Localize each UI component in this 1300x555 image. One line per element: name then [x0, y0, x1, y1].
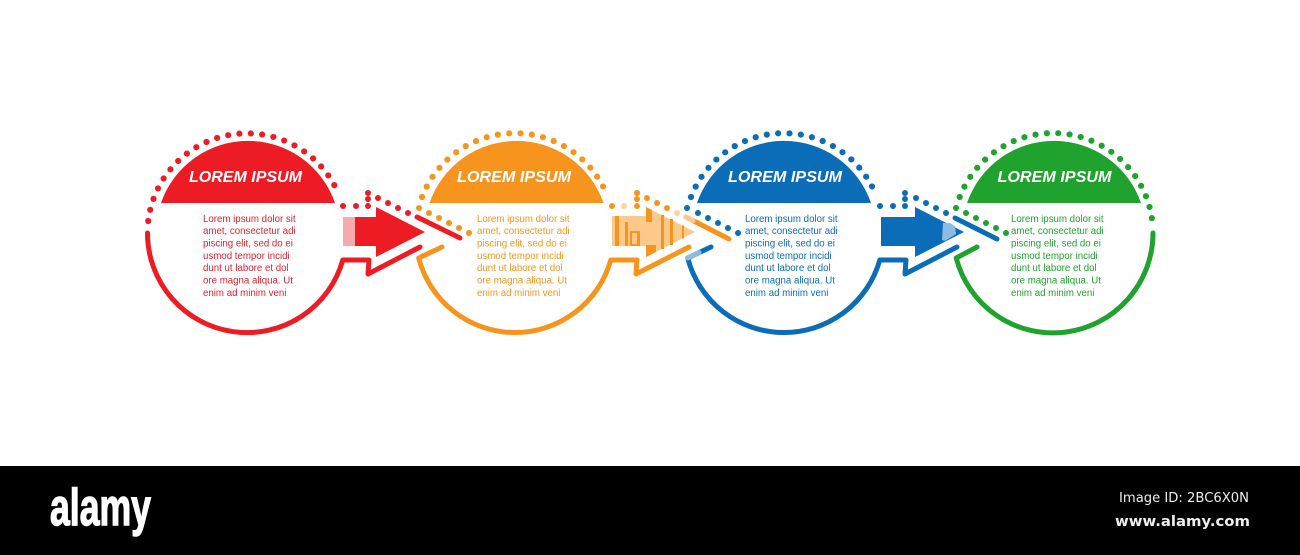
- dotted upper ring: [422, 133, 607, 197]
- panel: step 4 green: [953, 133, 1153, 333]
- body text: usmod tempor incidi: [745, 251, 832, 262]
- lower ring with connector: [419, 247, 689, 333]
- dotted upper ring: [148, 133, 339, 221]
- lower ring with connector: [688, 247, 957, 333]
- connector dots: [340, 190, 411, 216]
- panel: step 1 red: [147, 133, 460, 333]
- body text: ore magna aliqua. Ut: [1011, 276, 1101, 286]
- body text: amet, consectetur adi: [203, 226, 296, 237]
- footer band: [0, 466, 1300, 555]
- pointer bar: [686, 217, 729, 239]
- body text: Lorem ipsum dolor sit: [203, 214, 296, 225]
- website: www.alamy.com: [1115, 514, 1250, 530]
- body text: piscing elit, sed do ei: [203, 238, 293, 250]
- body text: usmod tempor incidi: [1011, 251, 1098, 262]
- ring watermark: [688, 252, 699, 258]
- arrow with watermark stripes: [612, 207, 695, 257]
- arrow: [343, 207, 425, 257]
- dotted upper ring: [960, 133, 1152, 222]
- body text: enim ad minim veni: [203, 288, 286, 299]
- heading cap: [967, 141, 1141, 203]
- body text: Lorem ipsum dolor sit: [477, 214, 570, 225]
- body text: enim ad minim veni: [745, 288, 828, 299]
- body text: dunt ut labore et dol: [203, 263, 289, 274]
- pointer bar watermark: [686, 217, 693, 220]
- heading cap: [161, 141, 335, 203]
- body text: ore magna aliqua. Ut: [203, 276, 293, 286]
- body text: enim ad minim veni: [477, 288, 560, 299]
- body text: usmod tempor incidi: [203, 251, 290, 262]
- heading: LOREM IPSUM: [998, 169, 1113, 186]
- connector dots: [877, 190, 949, 216]
- heading: LOREM IPSUM: [728, 169, 843, 186]
- body text: dunt ut labore et dol: [477, 263, 563, 274]
- heading: LOREM IPSUM: [189, 169, 303, 186]
- body text: dunt ut labore et dol: [1011, 263, 1097, 274]
- body text: amet, consectetur adi: [745, 226, 838, 237]
- heading: LOREM IPSUM: [457, 169, 572, 186]
- body text: piscing elit, sed do ei: [1011, 238, 1101, 250]
- body text: Lorem ipsum dolor sit: [1011, 214, 1104, 225]
- body text: enim ad minim veni: [1011, 288, 1094, 299]
- body text: piscing elit, sed do ei: [477, 238, 567, 250]
- panel: step 3 blue: [684, 133, 997, 333]
- logo: alamy: alamy: [50, 479, 151, 537]
- body text: usmod tempor incidi: [477, 251, 564, 262]
- pointer bar: [417, 217, 460, 238]
- body text: amet, consectetur adi: [477, 226, 570, 237]
- image id: Image ID: 2BC6X0N: [1119, 490, 1249, 506]
- heading cap: [430, 141, 604, 203]
- panel: step 2 orange: [416, 133, 729, 333]
- body text: ore magna aliqua. Ut: [477, 276, 567, 286]
- connector dots: [609, 190, 680, 216]
- dotted upper ring: [691, 133, 876, 197]
- watermark fragment: [942, 223, 956, 241]
- incoming dots: [684, 205, 741, 236]
- body text: ore magna aliqua. Ut: [745, 276, 835, 286]
- incoming dots: [416, 205, 472, 236]
- body text: dunt ut labore et dol: [745, 263, 831, 274]
- lower ring: [956, 233, 1153, 333]
- heading cap: [697, 141, 871, 203]
- body text: piscing elit, sed do ei: [745, 238, 835, 250]
- arrow: [881, 207, 964, 257]
- incoming dots: [953, 205, 1009, 236]
- pointer bar: [955, 218, 997, 239]
- body text: Lorem ipsum dolor sit: [745, 214, 838, 225]
- lower ring with connector: [147, 233, 420, 333]
- watermark fragment: [343, 217, 355, 246]
- body text: amet, consectetur adi: [1011, 226, 1104, 237]
